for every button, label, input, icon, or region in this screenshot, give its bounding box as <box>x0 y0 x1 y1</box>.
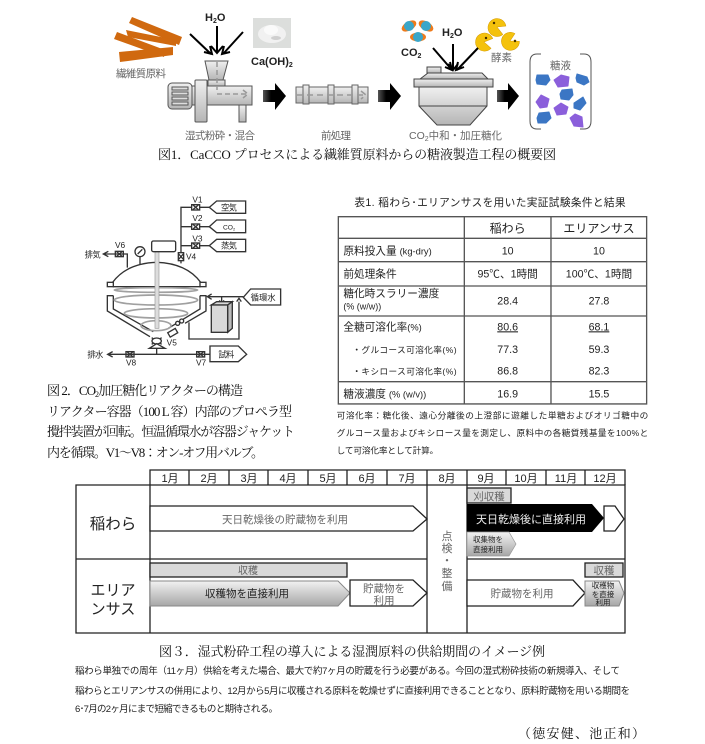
icon: saccharification reactor <box>414 67 493 125</box>
row: xylose: ・キシロース可溶化率(%) <box>352 366 457 377</box>
arrow: stored rice straw <box>150 506 427 531</box>
body paragraph: 6･7月の2ヶ月にまで短縮できるものと期待される。 <box>75 703 278 715</box>
label: Ca(OH)2: 2 <box>289 62 293 69</box>
caption: figure 2: 加圧糖化リアクターの構造 <box>98 383 243 398</box>
arrow: direct use of harvest <box>150 581 350 606</box>
month header: 3月 <box>240 473 258 485</box>
icon: CO2 molecules <box>400 18 435 42</box>
label: CO2 neutralisation and pressurised saccharification: CO <box>409 130 425 142</box>
row: slurry concentration: 28.4 <box>497 295 518 307</box>
icon: pretreatment tube <box>296 85 368 104</box>
caption: figure 1: 図1．CaCCO プロセスによる繊維質原料からの糖液製造工程の概要図 <box>158 147 556 162</box>
arrow: direct use after sun drying: 天日乾燥後に直接利用 <box>476 512 586 526</box>
figure 1: process diagram <box>114 12 591 143</box>
arrow: step 2 to 3 <box>378 83 401 110</box>
label: enzyme: 酵素 <box>491 51 512 64</box>
table footnote: 可溶化率：糖化後、遠心分離後の上澄部に遊離した単糖およびオリゴ糖中の <box>337 409 648 420</box>
label: sugar liquid: 糖液 <box>550 59 572 72</box>
row: total sugar solubilisation: 68.1 <box>589 321 609 333</box>
bar: erianthus harvest <box>150 563 347 577</box>
label: pretreatment: 前処理 <box>321 129 352 142</box>
month header: 9月 <box>477 473 495 485</box>
drain line <box>87 348 210 360</box>
table grid <box>338 217 647 404</box>
label: Ca(OH)2: Ca(OH) <box>251 56 289 68</box>
arrow: direct use December: 利用 <box>596 597 610 607</box>
text: inspection and maintenance: 検 <box>442 541 452 555</box>
month header: 2月 <box>200 473 218 485</box>
arrow: step 3 to 4 <box>497 83 519 110</box>
arrows: inputs to hopper <box>190 26 243 54</box>
arrow: stored erianthus June July <box>350 580 427 607</box>
row label: erianthus: エリア <box>90 582 136 599</box>
text: inspection and maintenance <box>442 530 452 593</box>
author credit: （徳安健、池正和） <box>518 726 645 741</box>
valve labels <box>115 194 207 368</box>
valve labels: V3 <box>192 234 203 244</box>
arrow: December continuation <box>604 506 624 531</box>
row: raw material input <box>343 245 605 258</box>
table footnote <box>337 409 648 455</box>
bar: erianthus harvest: 収穫 <box>238 565 258 577</box>
month header: 12月 <box>593 473 617 485</box>
table footnote: して可溶化率として計算。 <box>337 444 438 455</box>
label: H2O reactor: H <box>442 27 450 39</box>
caption: figure 3: 図３．湿式粉砕工程の導入による湿潤原料の供給期間のイメージ例 <box>159 644 545 659</box>
text: inspection and maintenance: 備 <box>442 580 452 593</box>
label: H2O reactor: 2 <box>450 33 454 40</box>
gas lines <box>181 207 210 263</box>
exhaust line: 排気 <box>85 249 101 259</box>
bottom valve V5 <box>149 319 184 348</box>
row: slurry concentration: 糖化時スラリー濃度 <box>343 287 440 300</box>
valve labels: V8 <box>126 358 137 368</box>
row: total sugar solubilisation <box>343 320 609 333</box>
body paragraph: 稲わらとエリアンサスの併用により、12月から5月に収穫される原料を乾燥せずに直接利用できることとなり、原料貯蔵物を用いる期間を <box>75 685 630 697</box>
bar: erianthus harvest December <box>585 563 623 577</box>
month header: 4月 <box>279 473 297 485</box>
row: xylose <box>352 366 609 378</box>
figure 2: reactor schematic <box>85 194 281 368</box>
exhaust line <box>85 249 127 268</box>
row: raw material input: 10 <box>593 246 605 258</box>
arrow: stored material autumn <box>467 580 585 606</box>
arrow: direct use of collected straw <box>467 532 516 556</box>
month header: 8月 <box>438 473 456 485</box>
arrow: direct use of collected straw: 直接利用 <box>473 544 503 554</box>
valve labels: V1 <box>192 194 203 204</box>
icon: sugar liquid vessel <box>530 54 591 129</box>
text: inspection and maintenance: 整 <box>442 566 452 580</box>
month header: 10月 <box>514 473 538 485</box>
valve labels: V2 <box>192 213 203 223</box>
arrows: inputs to reactor <box>433 44 478 70</box>
row: sugar concentration: 16.9 <box>497 389 518 401</box>
row: sugar concentration: 糖液濃度 (% (w/v)) <box>343 388 426 401</box>
drain line: 排水 <box>87 350 104 360</box>
row: raw material input: 原料投入量 (kg-dry) <box>343 245 432 258</box>
text: inspection and maintenance: ・ <box>442 555 452 567</box>
table header: エリアンサス <box>563 222 635 236</box>
body paragraph <box>75 665 630 715</box>
tag: air <box>209 201 246 213</box>
month header: 6月 <box>358 473 376 485</box>
row: sugar concentration: 15.5 <box>589 389 609 401</box>
circulating water loop <box>189 289 281 339</box>
label: raw material: 繊維質原料 <box>116 67 166 80</box>
row: glucose <box>352 344 609 356</box>
bar: rice straw harvest: 刈収穫 <box>473 490 505 503</box>
arrow: direct use of collected straw: 収集物を <box>473 534 503 544</box>
tag: sample <box>210 346 247 362</box>
row: glucose: 59.3 <box>589 344 609 356</box>
row: total sugar solubilisation: 80.6 <box>497 321 518 333</box>
label: H2O: H <box>205 12 213 24</box>
row: slurry concentration <box>343 287 609 312</box>
month header: 1月 <box>161 473 179 485</box>
tag: CO2 <box>209 220 246 233</box>
circulating water loop: 循環水 <box>251 292 276 302</box>
figure 3: supply schedule chart <box>76 470 625 633</box>
arrow: direct use December <box>585 580 624 607</box>
arrow: direct use December: 収穫物 <box>592 580 615 590</box>
caption: figure 2: 攪拌装置が回転。恒温循環水が容器ジャケット <box>47 424 295 439</box>
arrow: stored material autumn: 貯蔵物を利用 <box>490 587 554 600</box>
icon: wet grinder <box>168 61 252 122</box>
row: slurry concentration: (% (w/w)) <box>343 302 381 312</box>
bar: erianthus harvest December: 収穫 <box>594 565 615 577</box>
tag: air: 空気 <box>221 202 237 212</box>
label: H2O: 2 <box>213 18 217 25</box>
row: sugar concentration <box>343 388 609 401</box>
label: wet grinding and mixing: 湿式粉砕・混合 <box>185 129 256 142</box>
month header: 7月 <box>398 473 416 485</box>
tag: CO2: CO <box>223 224 233 231</box>
reactor vessel <box>107 262 206 337</box>
pressure gauge <box>135 247 145 265</box>
table footnote: グルコース量およびキシロース量を測定し、原料中の各糖質残基量を100%と <box>337 427 648 438</box>
arrow: stored erianthus June July: 貯蔵物を <box>363 582 405 595</box>
label: CO2 neutralisation and pressurised saccharification: 2 <box>425 136 429 143</box>
motor <box>152 241 176 252</box>
icon: calcium hydroxide powder <box>253 18 291 48</box>
row: pretreatment <box>343 268 632 281</box>
caption: figure 2: リアクター容器（100 L 容）内部のプロペラ型 <box>47 404 292 419</box>
table header <box>490 222 635 236</box>
tag: steam <box>209 239 246 252</box>
valve labels: V7 <box>196 358 207 368</box>
row: glucose: ・グルコース可溶化率(%) <box>352 344 457 355</box>
tag: steam: 蒸気 <box>221 241 237 251</box>
row label: rice straw: 稲わら <box>90 515 136 533</box>
row: pretreatment: 前処理条件 <box>343 268 397 281</box>
row: glucose: 77.3 <box>497 344 518 356</box>
icon: enzymes <box>474 16 522 54</box>
temperature tank <box>211 302 232 332</box>
row: raw material input: 10 <box>502 246 514 258</box>
arrow: direct use of harvest: 収穫物を直接利用 <box>205 587 289 600</box>
valve labels: V4 <box>186 252 197 262</box>
month header <box>150 470 625 485</box>
arrow: step 1 to 2 <box>263 83 286 110</box>
valve labels: V6 <box>115 240 126 250</box>
row: xylose: 86.8 <box>497 366 518 378</box>
label: CO2: 2 <box>418 53 422 60</box>
table title: 表1. 稲わら･エリアンサスを用いた実証試験条件と結果 <box>354 196 626 209</box>
month header: 5月 <box>319 473 337 485</box>
caption: figure 2: 2 <box>95 390 99 399</box>
label: CO2 neutralisation and pressurised saccharification: 中和・加圧糖化 <box>429 129 502 142</box>
valves V1 to V8 <box>115 205 205 357</box>
row label: erianthus: ンサス <box>91 601 135 618</box>
table header: 稲わら <box>490 222 526 236</box>
arrow: stored rice straw: 天日乾燥後の貯蔵物を利用 <box>222 513 348 526</box>
tag: CO2: 2 <box>233 226 236 231</box>
label: H2O reactor: O <box>454 27 463 39</box>
arrow: direct use after sun drying <box>467 504 604 532</box>
caption: figure 2: 内を循環。V1～V8：オン-オフ用バルブ。 <box>47 445 264 460</box>
icon: fibrous raw material strips <box>114 17 182 62</box>
row label: erianthus <box>90 582 136 618</box>
caption: figure 2 <box>47 383 295 460</box>
impeller and shaft <box>114 252 198 331</box>
valve labels: V5 <box>167 338 177 348</box>
month header: 11月 <box>555 473 577 485</box>
arrow: direct use December: を直接 <box>592 589 615 599</box>
label: H2O: O <box>217 12 226 24</box>
body paragraph: 稲わら単独での周年（11ヶ月）供給を考えた場合、最大で約7ヶ月の貯蔵を行う必要がある。今回の湿式粉砕技術の新規導入、そして <box>75 665 620 677</box>
bar: rice straw harvest <box>467 488 511 503</box>
row: total sugar solubilisation: 全糖可溶化率(%) <box>343 320 422 333</box>
tag: sample: 試料 <box>218 349 235 359</box>
arrow: stored erianthus June July: 利用 <box>374 595 394 607</box>
caption: figure 2: 図 2．CO <box>47 383 96 398</box>
chart frame <box>76 485 625 633</box>
row: xylose: 82.3 <box>589 366 609 378</box>
label: CO2: CO <box>401 47 418 59</box>
row: pretreatment: 100℃、1時間 <box>566 269 632 281</box>
table 1: test conditions and results <box>337 196 648 455</box>
row: slurry concentration: 27.8 <box>589 295 609 307</box>
text: inspection and maintenance: 点 <box>442 530 452 543</box>
row: pretreatment: 95℃、1時間 <box>477 269 538 281</box>
